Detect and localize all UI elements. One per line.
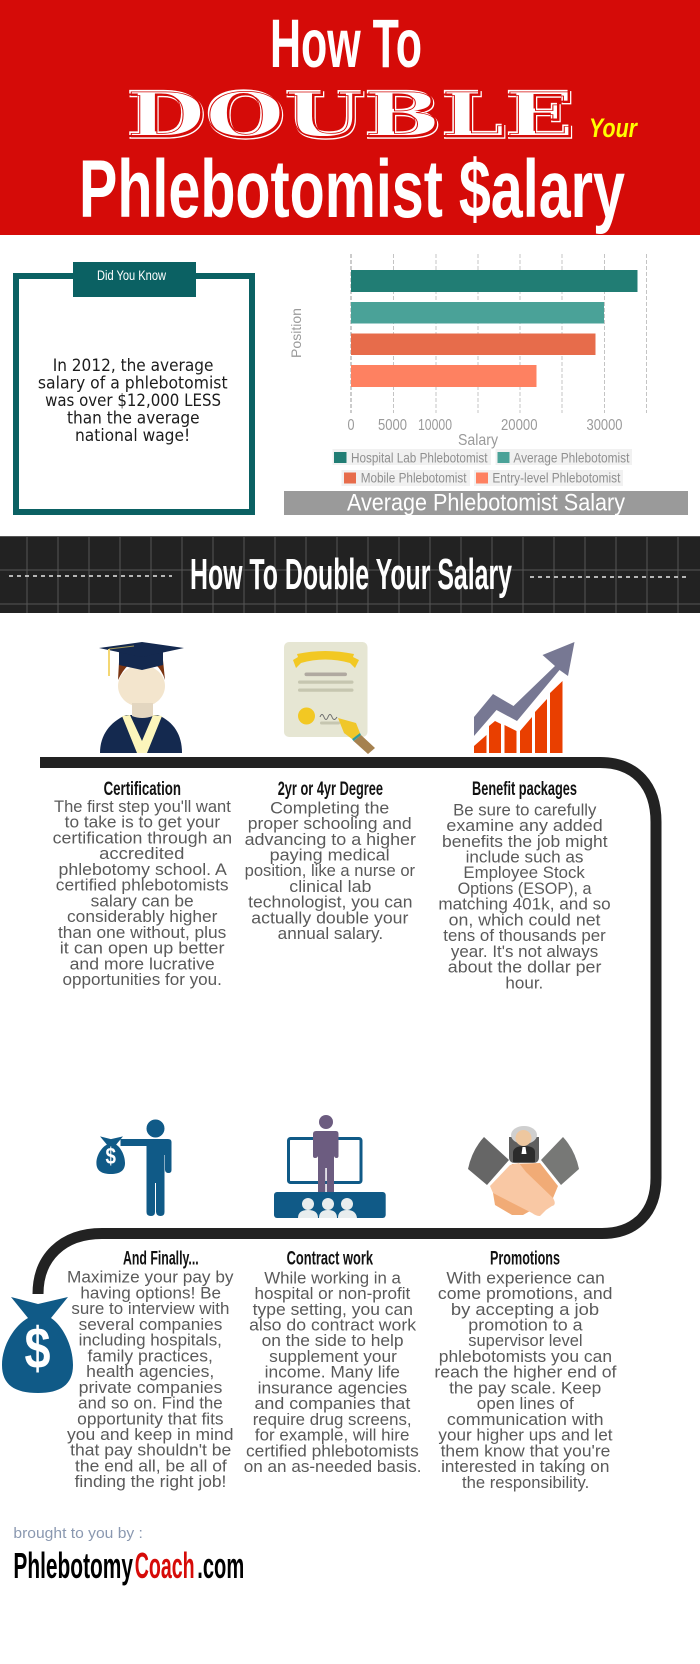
icon: diploma [284, 642, 375, 754]
text: and finally body: several companies [79, 1315, 222, 1334]
text: certification body: opportunities for you. [62, 970, 222, 989]
text: and finally body: having options! Be [80, 1283, 221, 1302]
text: and finally body: private companies [79, 1378, 222, 1397]
chart title bar: Average Phlebotomist Salary [347, 490, 625, 517]
text: contract work body: supplement your [269, 1347, 397, 1366]
text: promotions body: With experience can [446, 1268, 605, 1287]
text: degree body: clinical lab [289, 877, 371, 896]
text: salary fact: national wage! [75, 426, 190, 446]
text: certification body: accredited [99, 844, 184, 863]
icon: small money bag: $ [105, 1144, 116, 1169]
step: and finally [67, 1248, 234, 1491]
legend: Average Phlebotomist [513, 450, 629, 466]
text: benefit packages body: matching 401k, and so [438, 895, 611, 914]
text: degree body: Completing the [270, 798, 389, 817]
axis ticks: 30000 [586, 417, 623, 434]
text: benefit packages body: about the dollar per [448, 958, 602, 977]
text: and finally body: sure to interview with [71, 1299, 229, 1318]
text: certification body: phlebotomy school. A [58, 860, 227, 879]
step: promotions [434, 1248, 617, 1492]
text: and finally body: health agencies, [86, 1362, 214, 1381]
text: salary fact: In 2012, the average [53, 356, 213, 376]
heading: degree: 2yr or 4yr Degree [278, 779, 383, 800]
text: promotions body: phlebotomists you can [439, 1347, 612, 1366]
text: certification body [53, 797, 232, 989]
text: contract work body: type setting, you can [253, 1300, 413, 1319]
text: benefit packages body: tens of thousands per [443, 926, 606, 945]
bar: entry-level [351, 365, 536, 387]
legend: Entry-level Phlebotomist [492, 470, 620, 486]
bar: hospital lab [351, 270, 638, 292]
text: promotions body [434, 1268, 617, 1492]
text: and finally body: you and keep in mind [67, 1425, 234, 1444]
text: certification body: salary can be [91, 891, 194, 910]
text: benefit packages body [438, 800, 611, 992]
icon: handshake [468, 1126, 579, 1216]
text: and finally body [67, 1268, 234, 1491]
text: salary fact [38, 356, 228, 446]
text: and finally body: the end all, be all of [75, 1456, 227, 1475]
text: and finally body: and so on. Find the [78, 1394, 223, 1412]
heading: promotions: Promotions [490, 1248, 560, 1269]
text: contract work body: for example, will hire [255, 1426, 409, 1445]
tab: did you know: Did You Know [97, 267, 167, 283]
text: contract work body: and companies that [254, 1394, 411, 1413]
text: contract work body: income. Many life [265, 1363, 400, 1382]
text: degree body: annual salary. [278, 924, 383, 943]
icon: presentation [274, 1115, 386, 1218]
text: and finally body: including hospitals, [79, 1331, 222, 1350]
text: promotions body: supervisor level [468, 1331, 583, 1350]
text: promotions body: promotion to a [468, 1316, 583, 1334]
text: certification body: considerably higher [67, 907, 218, 926]
axis label: salary: Salary [458, 432, 498, 449]
text: degree body: paying medical [270, 846, 390, 864]
title word: DOUBLE: DOUBLE [127, 79, 575, 152]
text: promotions body: come promotions, and [438, 1284, 612, 1303]
title word: Your: Your [589, 113, 638, 143]
axis ticks [348, 417, 623, 434]
text: promotions body: open lines of [477, 1394, 574, 1413]
text: and finally body: family practices, [88, 1346, 213, 1365]
tab: did you know [73, 262, 196, 297]
text: degree body: technologist, you can [248, 893, 412, 912]
bar: mobile [351, 334, 596, 355]
title word: DOUBLE: DOUBLE [126, 78, 574, 151]
panel: did you know [16, 262, 252, 512]
footer: logo: .com [197, 1545, 244, 1586]
text: promotions body: them know that you're [441, 1441, 610, 1460]
heading: and finally: And Finally... [123, 1248, 199, 1269]
step: certification [53, 779, 232, 989]
heading: benefit packages: Benefit packages [472, 779, 577, 800]
icon: man holding money bag [96, 1120, 172, 1216]
footer: brought to you by: brought to you by : [13, 1525, 143, 1542]
legend [332, 449, 632, 486]
text: salary fact: was over $12,000 LESS [45, 391, 221, 411]
axis ticks: 0 [348, 417, 355, 434]
section banner: how to double your salary [0, 536, 700, 613]
text: promotions body: communication with [447, 1410, 604, 1429]
text: benefit packages body: Options (ESOP), a [458, 879, 592, 898]
icon: large money bag [2, 1297, 73, 1393]
text: contract work body: certified phlebotomists [246, 1441, 419, 1460]
text: degree body: proper schooling and [248, 814, 412, 833]
bar chart: average phlebotomist salary [284, 254, 688, 517]
legend: Hospital Lab Phlebotomist [351, 450, 488, 466]
text: benefit packages body: on, which could net [449, 910, 601, 929]
text: contract work body: hospital or non-profit [254, 1284, 411, 1303]
text: promotions body: the responsibility. [462, 1473, 589, 1492]
text: contract work body: on the side to help [262, 1331, 404, 1350]
text: promotions body: interested in taking on [441, 1457, 609, 1476]
text: certification body: certification through an [53, 828, 232, 848]
text: promotions body: the pay scale. Keep [449, 1378, 601, 1397]
text: contract work body: on an as-needed basis. [244, 1457, 422, 1476]
step: contract work [244, 1248, 422, 1476]
text: contract work body: also do contract work [249, 1316, 417, 1334]
text: promotions body: by accepting a job [451, 1300, 599, 1319]
bar: average [351, 302, 604, 324]
axis ticks: 10000 [418, 417, 452, 434]
text: promotions body: reach the higher end of [434, 1363, 617, 1382]
heading: contract work: Contract work [287, 1248, 373, 1269]
icon: large money bag: $ [24, 1316, 50, 1381]
axis ticks: 20000 [501, 417, 538, 434]
title word: DOUBLE: DOUBLE [127, 80, 575, 152]
text: certification body: The first step you'll want [54, 797, 231, 816]
text: certification body: and more lucrative [70, 954, 215, 973]
step: degree [245, 779, 416, 943]
text: and finally body: that pay shouldn't be [70, 1441, 231, 1460]
axis label: position: Position [288, 308, 304, 358]
text: salary fact: than the average [67, 408, 200, 428]
icon: rising chart [474, 642, 574, 753]
text: degree body [245, 798, 416, 943]
legend: Mobile Phlebotomist [361, 470, 467, 486]
text: and finally body: opportunity that fits [77, 1409, 224, 1428]
step: benefit packages [438, 779, 611, 992]
text: benefit packages body: benefits the job might [442, 832, 608, 851]
text: certification body: to take is to get your [65, 813, 220, 832]
text: certification body: it can open up better [60, 939, 225, 958]
icon: graduate [99, 642, 184, 753]
text: contract work body: While working in a [264, 1268, 401, 1287]
title word: DOUBLE [125, 77, 575, 152]
text: promotions body: your higher ups and let [438, 1426, 613, 1445]
text: contract work body [244, 1268, 422, 1476]
footer: logo: Coach [135, 1545, 195, 1586]
text: benefit packages body: year. It's not always [451, 942, 598, 961]
text: certification body: than one without, plus [58, 923, 226, 942]
text: benefit packages body: hour. [505, 973, 543, 992]
footer: logo: Phlebotomy [13, 1545, 133, 1586]
text: benefit packages body: include such as [466, 848, 584, 866]
timeline track [38, 762, 656, 1294]
text: certification body: certified phlebotomists [56, 876, 229, 895]
text: contract work body: require drug screens, [253, 1410, 412, 1429]
text: salary fact: salary of a phlebotomist [38, 374, 228, 394]
text: benefit packages body: examine any added [446, 816, 603, 835]
text: degree body: actually double your [251, 908, 409, 927]
text: and finally body: Maximize your pay by [67, 1268, 234, 1287]
text: contract work body: insurance agencies [258, 1378, 407, 1397]
title word: DOUBLE: DOUBLE [125, 77, 573, 150]
title line: How To: How To [270, 5, 422, 82]
text: and finally body: finding the right job! [75, 1472, 226, 1491]
text: degree body: advancing to a higher [245, 830, 416, 849]
heading: certification: Certification [104, 779, 181, 800]
text: benefit packages body: Be sure to carefully [453, 800, 597, 819]
text: degree body: position, like a nurse or [245, 861, 415, 880]
axis ticks: 5000 [378, 417, 407, 434]
header banner [0, 0, 700, 235]
text: benefit packages body: Employee Stock [463, 863, 585, 882]
